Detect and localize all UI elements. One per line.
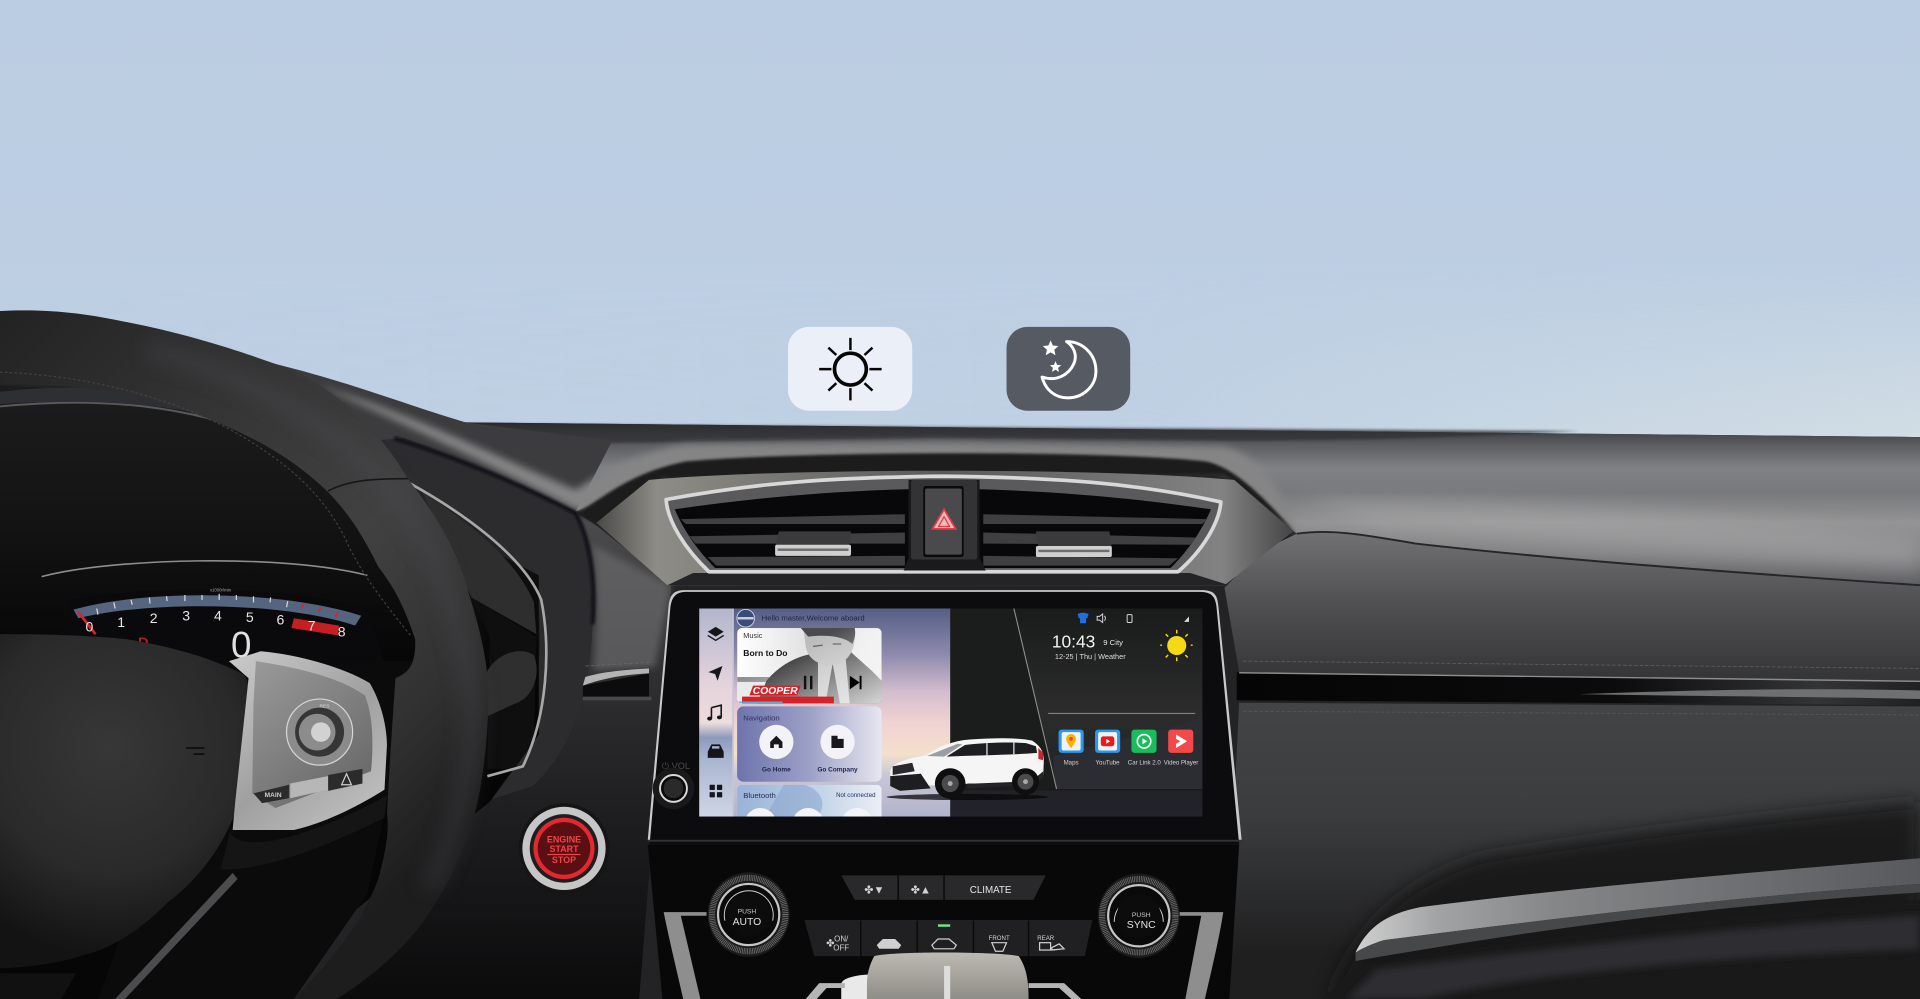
right temperature knob: PUSH [1132,912,1151,919]
cluster screen [67,590,392,686]
right temperature knob [1098,874,1180,958]
cooper logo: COOPER [753,686,798,697]
avatar [737,609,755,627]
sidebar icons [707,627,724,797]
icon: recirculate car [877,939,901,949]
stitching upper [1243,661,1920,668]
start button label: ENGINE [547,834,581,844]
engine start button [519,803,609,894]
car grille and lamps [893,763,915,775]
climate lower buttons: ON/ [834,934,849,943]
tachometer: 0 [231,624,251,665]
climate top buttons: ✤▲ [911,885,931,897]
gloss black strip [1237,672,1920,705]
icon: maps [1059,730,1084,753]
centre blank button [290,776,328,798]
navigation card [737,706,882,782]
infotainment unit [648,590,1242,845]
right dark wallpaper [950,608,1202,817]
car lower body [967,771,1043,788]
switch panel inner [252,661,372,808]
wheel inner shade [98,661,416,999]
cluster arc [42,561,367,577]
rim stitching [0,372,411,637]
tachometer numbers: 8 [338,624,346,640]
progress bar [738,702,782,703]
climate lower buttons: REAR [1037,935,1055,942]
icon: grid [710,785,722,797]
home shortcut: Go Home [762,766,791,773]
welcome text: Hello master,Welcome aboard [762,614,865,623]
MAIN button [253,785,289,803]
night mode button [1007,327,1130,411]
interior behind wheel [422,492,536,634]
wheel rim [0,310,489,999]
start button label [547,834,581,865]
music card: Born to Do [743,648,788,658]
bezel lower edge [648,840,1242,842]
rim seam [328,479,408,491]
lower leather panel [1224,703,1920,999]
left temperature knob [708,872,790,957]
airbag mark [186,748,204,754]
app icons [1059,730,1198,767]
soft pad highlight [1298,501,1920,569]
chrome trim [1356,858,1920,952]
icon: navigation arrow [708,666,722,681]
volume knob [653,768,694,809]
tachometer: x1000r/min [210,587,232,592]
icon: signal [1184,616,1189,622]
day mode button [788,327,912,411]
MAIN button: MAIN [264,792,282,799]
icon: speaker [1097,614,1105,623]
car wheels [935,768,1039,799]
start button label: START [549,844,579,854]
navigation card: Navigation [743,713,780,722]
tachometer numbers: 3 [182,608,190,624]
chrome cluster trim [410,484,546,776]
icon: battery [1127,615,1132,623]
sky background [1370,338,1920,437]
album photo [737,628,882,704]
icon: layers [708,627,724,640]
company shortcut [817,725,858,773]
bluetooth card: Not connected [836,792,876,799]
control dial [287,699,353,765]
icon: car [708,744,724,758]
tachometer: D [138,636,149,652]
gear lever [806,952,1081,999]
cooper logo [742,686,834,704]
start button label: STOP [552,855,576,865]
icon: pause [804,676,812,689]
side chrome left [664,912,707,999]
hood silver line [0,403,214,420]
app labels: Video Player [1164,760,1198,767]
right louvres [983,514,1207,566]
stitching near screen [585,662,651,666]
led [938,924,950,927]
tachometer numbers: 4 [214,608,222,624]
climate lower buttons [804,920,1092,956]
side chrome right [1179,912,1223,999]
icon: rear defrost [1040,943,1064,950]
icon: youtube [1095,730,1120,753]
bluetooth card: Bluetooth [743,791,776,800]
light leather ridge [318,386,1297,534]
left vent tab [775,531,851,556]
control dial: RES [319,704,330,710]
left temperature knob: AUTO [733,917,761,928]
icon: shirt [1078,613,1089,623]
icon: weather sun [1160,630,1193,661]
chrome surround and grey band [666,476,1221,572]
cluster hood [0,386,539,999]
climate top buttons: ✤▼ [864,885,884,897]
tachometer numbers: 7 [308,617,316,633]
icon: fresh air car [932,939,956,949]
switch panel silver [229,651,387,830]
redline [291,618,339,635]
climate top buttons [841,875,1046,900]
location: 9 City [1103,638,1123,647]
car body [890,738,1044,787]
power volume label: ⏻ VOL [662,761,690,771]
left louvres [681,514,905,566]
left light wallpaper [699,608,950,817]
leather area right of cluster [306,512,671,999]
tachometer numbers: 1 [117,614,125,630]
app labels: YouTube [1096,760,1120,767]
car side windows [947,743,1037,757]
icon: music note [707,705,722,721]
lower left base [0,973,76,999]
bezel [648,590,1242,840]
tachometer numbers [85,608,346,640]
icon: car link [1131,730,1157,753]
climate top buttons: CLIMATE [970,885,1012,896]
left upper dash [263,361,1297,999]
left temperature knob: PUSH [738,908,756,915]
climate lower buttons: ✤ [826,938,834,949]
tachometer numbers: 6 [276,611,284,627]
tachometer numbers: 0 [85,619,93,635]
climate lower buttons: OFF [833,944,849,953]
vent housing [596,471,1293,585]
tachometer [73,587,361,665]
music card: Music [743,631,763,640]
home shortcut [759,725,793,773]
app labels [1064,760,1198,766]
dark crease to vent [394,438,594,624]
metal accent [583,668,649,686]
dark trim band around cluster [367,438,594,801]
lane assist button [328,769,362,791]
company shortcut: Go Company [817,766,858,773]
right temperature knob: SYNC [1127,920,1156,931]
tachometer numbers: 2 [150,610,158,626]
panel base [648,845,1239,999]
air vent unit [596,471,1293,585]
climate lower buttons: FRONT [989,935,1010,942]
turn stalk [484,651,537,716]
icon: sun [819,338,882,400]
icon: video player [1168,730,1193,753]
icon: front defrost [992,943,1007,951]
right vent tab [1036,531,1112,557]
divider [1048,712,1196,714]
status icons [1078,613,1189,623]
mid leather panel [1224,532,1920,681]
app labels: Maps [1064,760,1079,767]
tachometer numbers: 5 [246,609,254,625]
pad shadow band [465,424,1580,443]
rim highlight [147,349,472,888]
icon: moon and stars [1042,340,1096,398]
icon: next [850,676,862,689]
lower spoke [115,873,238,999]
steering wheel [0,310,489,999]
car windshield [927,744,962,757]
dashboard [0,355,1920,999]
lower shade [1329,802,1920,999]
bluetooth card [737,784,882,816]
vent cavity [675,488,1211,568]
climate control panel [648,845,1239,999]
car image [887,738,1048,800]
wheel hub [0,634,250,968]
display [699,608,1202,840]
vent underside shadow [667,573,1229,585]
upper dash pad [392,422,1920,585]
date line: 12-25 | Thu | Weather [1055,652,1126,661]
stitching lower [1243,711,1920,715]
dashboard base [0,355,1920,999]
instrument cluster [0,386,546,999]
crease line [1297,532,1920,585]
music card [737,628,882,704]
hazard button [904,480,986,571]
app labels: Car Link 2.0 [1128,760,1161,767]
clock: 10:43 [1052,632,1095,652]
